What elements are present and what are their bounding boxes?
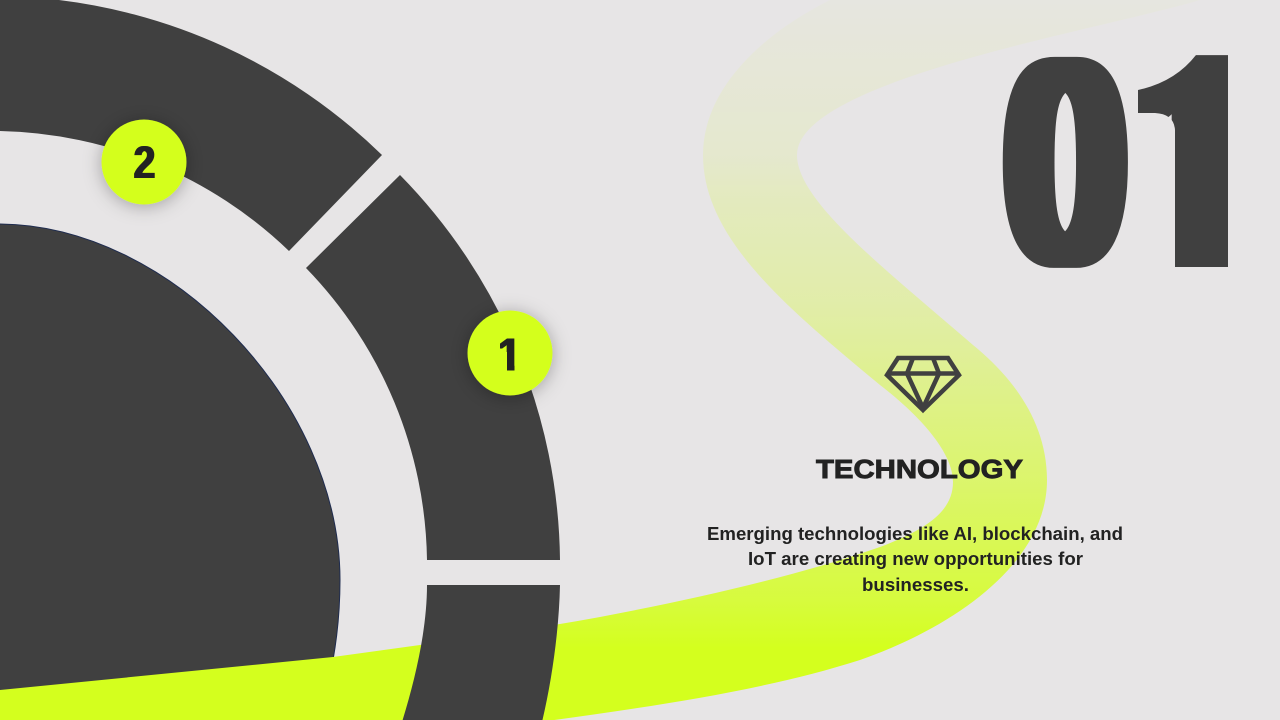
body text: [707, 523, 1123, 595]
body text: Emerging technologies like AI, blockchain, and: [707, 523, 1123, 544]
ring segment: right: [306, 175, 560, 560]
big number 01: 0: [1005, 0, 1126, 329]
heading: TECHNOLOGY: [816, 454, 1023, 484]
ring segment: bottom: [402, 585, 560, 720]
central dark disc: [0, 224, 340, 700]
icon: diamond: [887, 358, 959, 410]
badge 2: 2: [134, 137, 155, 188]
body text: IoT are creating new opportunities for: [748, 548, 1083, 569]
badge 2: [102, 120, 186, 204]
ring segment: top: [0, 0, 382, 251]
badge 1: [468, 310, 552, 396]
big number 01: [1002, 55, 1228, 268]
body text: businesses.: [862, 574, 969, 595]
badge 1: 1: [498, 330, 521, 381]
